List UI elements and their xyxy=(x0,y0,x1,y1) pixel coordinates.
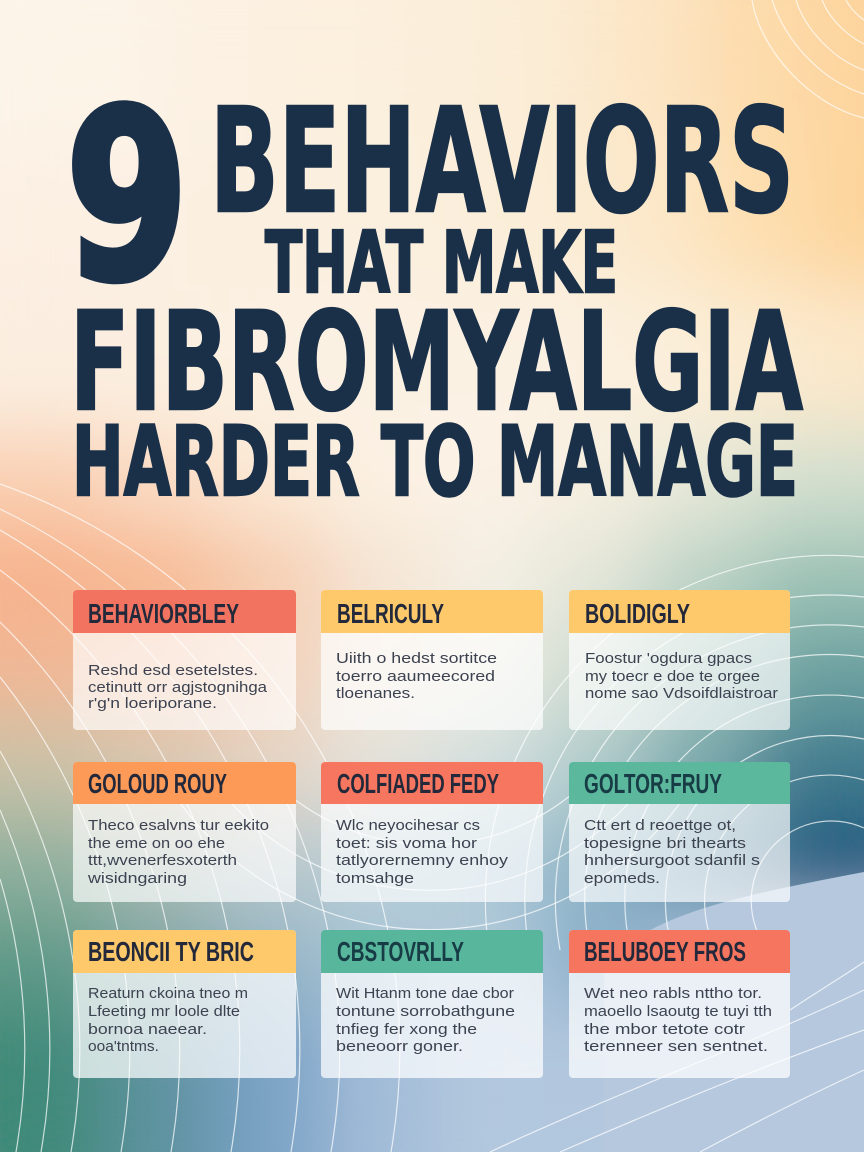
card 7 xyxy=(73,930,296,1078)
card 6 xyxy=(569,762,790,902)
card 1: r'g'n loeriporane. xyxy=(88,696,217,712)
card 7: Lfeeting mr loole dlte xyxy=(88,1004,240,1020)
title xyxy=(66,61,803,518)
card 6: epomeds. xyxy=(584,871,660,887)
card 4: ttt,wvenerfesxoterth xyxy=(88,853,237,869)
card 7: BEONCII TY BRIC xyxy=(88,936,254,967)
card 9: maoello lsaoutg te tuyi tth xyxy=(584,1004,772,1020)
card 3: Foostur 'ogdura gpacs xyxy=(585,651,752,667)
card 9: the mbor tetote cotr xyxy=(584,1022,745,1038)
card 3: BOLIDIGLY xyxy=(585,598,690,629)
card 9: Wet neo rabls nttho tor. xyxy=(584,986,762,1002)
card 1: Reshd esd esetelstes. xyxy=(88,663,258,679)
card 6: GOLTOR:FRUY xyxy=(584,768,722,799)
card 9 xyxy=(569,930,790,1078)
card 3: nome sao Vdsoifdlaistroar xyxy=(585,686,778,702)
card 7: bornoa naeear. xyxy=(88,1022,207,1038)
card 4: wisidngaring xyxy=(87,871,187,887)
card 3 xyxy=(569,590,790,730)
card 4: the eme on oo ehe xyxy=(88,836,225,852)
card 7: Reaturn ckoina tneo m xyxy=(88,986,248,1002)
card 4 xyxy=(73,762,296,902)
card 4: GOLOUD ROUY xyxy=(88,768,227,799)
card 8: beneoorr goner. xyxy=(336,1039,463,1055)
card 1 xyxy=(73,590,296,730)
card 8 xyxy=(321,930,543,1078)
card 1: BEHAVIORBLEY xyxy=(88,598,239,629)
card 2: Uiith o hedst sortitce xyxy=(336,651,497,667)
card 2: tloenanes. xyxy=(336,686,415,702)
card 3: my toecr e doe te orgee xyxy=(585,669,760,685)
card 6: topesigne bri thearts xyxy=(584,836,746,852)
card 2: toerro aaumeecored xyxy=(336,669,495,685)
card 5 xyxy=(321,762,543,902)
card 5: toet: sis voma hor xyxy=(336,836,477,852)
card 1: cetinutt orr agjstognihga xyxy=(88,680,268,696)
card 8: CBSTOVRLLY xyxy=(337,936,464,967)
card 8: tontune sorrobathgune xyxy=(336,1004,515,1020)
card 6: hnhersurgoot sdanfil s xyxy=(584,853,760,869)
title line: THAT MAKE: THAT MAKE xyxy=(265,214,618,313)
card 8: Wit Htanm tone dae cbor xyxy=(336,986,514,1002)
card 5: Wlc neyocihesar cs xyxy=(336,818,480,834)
card 6: Ctt ert d reoettge ot, xyxy=(584,818,736,834)
card 5: tomsahge xyxy=(336,871,414,887)
card 4: Theco esalvns tur eekito xyxy=(88,818,269,834)
card 2: BELRICULY xyxy=(337,598,444,629)
card 9: BELUBOEY FROS xyxy=(584,936,746,967)
big number 9: 9 xyxy=(66,61,188,332)
card 7: ooa'tntms. xyxy=(88,1039,159,1055)
card 9: terenneer sen sentnet. xyxy=(584,1039,768,1055)
card 2 xyxy=(321,590,543,730)
card 8: tnfieg fer xong the xyxy=(336,1022,477,1038)
card 5: tatlyorernemny enhoy xyxy=(336,853,509,869)
card 5: COLFIADED FEDY xyxy=(337,768,499,799)
